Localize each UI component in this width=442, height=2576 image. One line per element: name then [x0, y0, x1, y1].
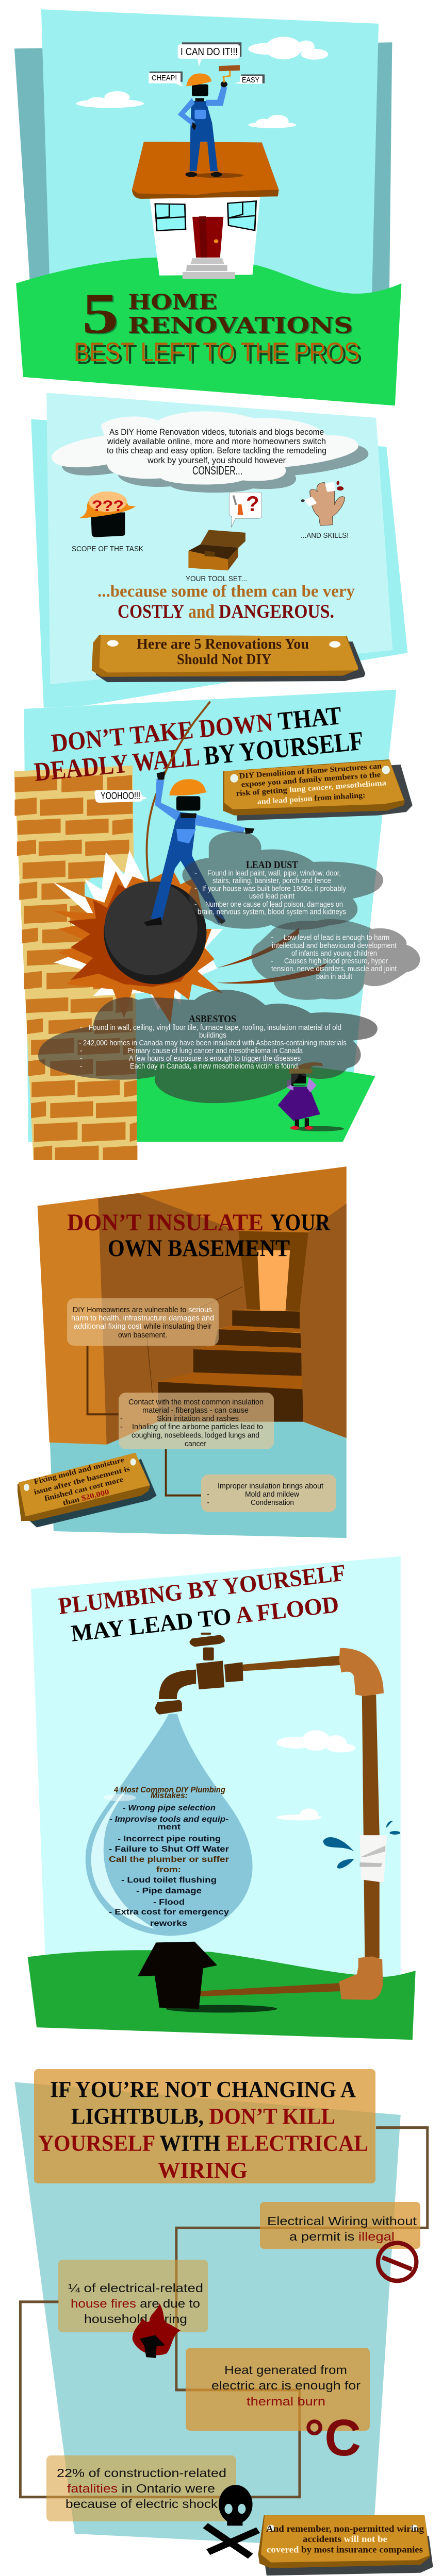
- text box: construction fatalities: because of electric shock: [66, 2497, 218, 2511]
- text box: vulnerable homeowners: harm to health, infrastructure damages and: [71, 1314, 214, 1323]
- text box: thermal burn: [186, 2348, 370, 2431]
- title: 5 home renovations: [82, 282, 353, 346]
- hero background panels: [14, 9, 401, 405]
- icon: house: [132, 142, 279, 279]
- smoke cloud: lead effects: Causes high blood pressure, hyper: [284, 957, 388, 965]
- heading: plumbing by yourself may lead to a flood: MAY LEAD TO A FLOOD: [70, 1591, 340, 1647]
- title: 5 home renovations: 5: [82, 282, 119, 346]
- text box: fiberglass: coughing, nosebleeds, lodged lungs and: [132, 1431, 259, 1439]
- text box: construction fatalities: 22% of construction-related: [57, 2466, 226, 2480]
- smoke cloud: asbestos: A few hours of exposure is enough to trigger the diseases: [129, 1055, 301, 1063]
- smoke cloud: asbestos: Each day in Canada, a new mesothelioma victim is found.: [130, 1062, 300, 1071]
- intro cloud: [52, 412, 368, 493]
- heading: don't insulate your own basement: OWN BASEMENT: [108, 1235, 290, 1262]
- text box: fiberglass: cancer: [185, 1440, 206, 1448]
- heading: changing a lightbulb: [34, 2069, 375, 2183]
- label: your tool set: YOUR TOOL SET...: [186, 574, 247, 583]
- smoke cloud: lead dust: -: [194, 869, 197, 877]
- text: plumbing mistakes: - Extra cost for emergency: [109, 1908, 229, 1917]
- demolition background, wall and lawn: [14, 690, 397, 1160]
- text box: thermal burn: electric arc is enough for: [211, 2379, 361, 2392]
- text: plumbing mistakes: - Pipe damage: [136, 1887, 202, 1895]
- text box: improper insulation: [201, 1475, 336, 1512]
- smoke cloud: asbestos: [38, 990, 378, 1103]
- text: plumbing mistakes: - Failure to Shut Off Water: [109, 1845, 229, 1854]
- text box: permit: Electrical Wiring without: [267, 2214, 417, 2228]
- icon: bandaged hand: [301, 481, 345, 526]
- icon: skull and crossbones: [205, 2485, 258, 2556]
- smoke cloud: asbestos: -: [80, 1062, 83, 1071]
- basement room scene: [38, 1166, 347, 1538]
- text: costly and dangerous: COSTLY: [118, 601, 184, 622]
- text box: construction fatalities: [46, 2455, 236, 2521]
- wooden sign: here are 5 renovations: [92, 635, 365, 682]
- icon: burning house: [133, 2303, 181, 2358]
- wooden sign: mold cost: [18, 1453, 157, 1528]
- panel: hero: [14, 9, 401, 405]
- text: plumbing mistakes: - Incorrect pipe routing: [118, 1835, 221, 1843]
- heading: don't insulate your own basement: DON’T INSULATE: [67, 1209, 264, 1236]
- wooden sign: mold cost: Fixing mold and moisture: [33, 1456, 125, 1486]
- smoke cloud: lead effects: of infants and young children: [291, 950, 377, 958]
- title: 5 home renovations: HOME: [128, 290, 217, 314]
- text box: vulnerable homeowners: DIY Homeowners are vulnerable to serious: [73, 1306, 212, 1314]
- text box: fiberglass: Contact with the most common insulation: [128, 1398, 264, 1406]
- icon: flooded house silhouette: [138, 1942, 277, 2012]
- text: costly and dangerous: DANGEROUS.: [219, 601, 334, 622]
- smoke cloud: lead dust: If your house was built before 1960s, it probably: [202, 885, 347, 893]
- panel: plumbing: [28, 1556, 416, 2040]
- smoke cloud: lead effects: -: [271, 934, 273, 942]
- icon: worker riding ball: [144, 771, 254, 926]
- smoke cloud: asbestos: -: [80, 1055, 83, 1063]
- wooden sign: insurance warning: covered by most insurance companies: [267, 2544, 423, 2554]
- text box: fiberglass: -: [120, 1423, 123, 1431]
- wooden sign: here are 5 renovations: Here are 5 Renovations You: [137, 636, 309, 652]
- text box: fiberglass: Skin irritation and rashes: [157, 1415, 239, 1423]
- callout: cheap: CHEAP!: [152, 74, 177, 82]
- callout: I can do it: I CAN DO IT!!!: [181, 46, 238, 58]
- text: plumbing mistakes: - Improvise tools and equip-: [109, 1815, 228, 1824]
- panel: consider intro: [31, 393, 407, 708]
- heading: don't insulate your own basement: YOUR: [270, 1209, 331, 1236]
- smoke cloud: lead effects: intellectual and behavioural development: [272, 942, 397, 950]
- text: plumbing mistakes: ment: [157, 1823, 181, 1832]
- smoke cloud: lead dust: brain, nervous system, blood system and kidneys: [198, 908, 346, 916]
- smoke cloud: lead effects: tension, nerve disorders, muscle and joint: [271, 965, 397, 973]
- panel: demolition wall: [14, 690, 420, 1160]
- title: 5 home renovations: RENOVATIONS: [128, 313, 353, 338]
- panel: electrical wiring: [14, 2069, 433, 2575]
- text box: thermal burn: thermal burn: [247, 2395, 325, 2408]
- wooden sign: mold cost: than $20,000: [62, 1488, 110, 1507]
- wooden sign: demolition warning: risk of getting lung cancer, mesothelioma: [236, 779, 387, 798]
- wooden sign: demolition warning: DIY Demolition of Home Structures can: [239, 762, 382, 781]
- plumbing sky and lawn: [28, 1556, 416, 2040]
- smoke cloud: lead dust: -: [194, 885, 197, 893]
- panel: basement insulation: [18, 1166, 347, 1538]
- text box: fiberglass: -: [120, 1415, 123, 1423]
- wooden sign: insurance warning: And remember, non-permitted wiring: [266, 2523, 424, 2534]
- smoke cloud: lead dust: stairs, railing, banister, porch and fence: [212, 877, 331, 885]
- wooden sign: demolition warning: [223, 759, 413, 821]
- heading: changing a lightbulb: LIGHTBULB, DON’T KILL: [71, 2104, 335, 2129]
- text box: construction fatalities: fatalities in Ontario were: [67, 2482, 215, 2495]
- text box: house fires: [58, 2260, 208, 2332]
- icon: confused head: [80, 492, 136, 537]
- intro background panels: [31, 393, 407, 708]
- text box: vulnerable homeowners: [67, 1298, 219, 1346]
- text box: permit: [260, 2202, 420, 2249]
- heading: changing a lightbulb: WIRING: [158, 2158, 248, 2183]
- smoke cloud: asbestos: -: [80, 1024, 83, 1032]
- icon: degrees celsius: °C: [304, 2409, 361, 2467]
- callout: easy: [234, 74, 265, 84]
- label: and skills: ...AND SKILLS!: [301, 531, 349, 540]
- text: plumbing mistakes: - Wrong pipe selection: [123, 1804, 216, 1812]
- smoke cloud: asbestos: Primary cause of lung cancer and mesothelioma in Canada: [127, 1047, 303, 1055]
- smoke cloud: lead dust: LEAD DUST: [246, 859, 299, 871]
- callout: cheap: [149, 72, 184, 87]
- wooden sign: insurance warning: accidents will not be: [303, 2534, 387, 2544]
- text box: improper insulation: -: [207, 1490, 209, 1499]
- rope and wrecking ball: [104, 702, 210, 984]
- heading: don't take down that deadly wall: DEADLY WALL BY YOURSELF: [33, 726, 365, 787]
- smoke cloud: lead effects: [251, 919, 420, 1000]
- smoke cloud: lead dust: [182, 832, 383, 930]
- smoke cloud: asbestos: ASBESTOS: [189, 1013, 236, 1025]
- text: plumbing mistakes: from:: [156, 1866, 181, 1874]
- smoke cloud: lead dust: Found in lead paint, wall, pipe, window, door,: [207, 870, 341, 878]
- smoke cloud: lead dust: Number one cause of lead poison, damages on: [205, 901, 343, 909]
- text: intro paragraph: As DIY Home Renovation videos, tutorials and blogs become: [109, 427, 324, 437]
- icon: confused head: ???: [92, 498, 124, 515]
- text box: improper insulation: Condensation: [251, 1499, 294, 1507]
- smoke cloud: asbestos: -: [80, 1047, 83, 1055]
- explosion: [52, 850, 328, 1024]
- heading: don't take down that deadly wall: [33, 701, 365, 787]
- subtitle: best left to the pros: BEST LEFT TO THE PROS: [74, 337, 359, 367]
- smoke cloud: lead effects: Low level of lead is enough to harm: [284, 934, 389, 942]
- icon: toolbox: [188, 530, 245, 570]
- text box: fiberglass: Inhaling of fine airborne particles lead to: [132, 1423, 263, 1431]
- wooden sign: demolition warning: expose you and family members to the: [241, 771, 381, 789]
- callout: yoohoo: YOOHOO!!!: [101, 791, 140, 802]
- heading: plumbing by yourself may lead to a flood: PLUMBING BY YOURSELF: [57, 1559, 347, 1619]
- icon: faucet: [155, 1633, 243, 1715]
- text: plumbing mistakes: 4 Most Common DIY Plumbing: [113, 1786, 225, 1794]
- smoke cloud: asbestos: Found in wall, ceiling, vinyl floor tile, furnace tape, roofing, insulation material of old: [89, 1024, 341, 1032]
- text box: vulnerable homeowners: own basement.: [118, 1331, 167, 1340]
- icon: girl covering face: [278, 1062, 344, 1131]
- text: plumbing mistakes: Call the plumber or suffer: [109, 1855, 229, 1864]
- text: plumbing mistakes: [109, 1786, 229, 1928]
- wooden sign: here are 5 renovations: Should Not DIY: [177, 652, 271, 668]
- smoke cloud: lead dust: used lead paint: [249, 892, 294, 901]
- text box: house fires: house fires are due to: [71, 2297, 200, 2310]
- text box: permit: a permit is illegal: [289, 2230, 395, 2243]
- heading: don't insulate your own basement: [67, 1209, 331, 1262]
- icon: prohibition sign: [378, 2243, 416, 2281]
- smoke cloud: lead effects: -: [271, 957, 273, 965]
- text box: fiberglass: [119, 1393, 274, 1449]
- text box: thermal burn: Heat generated from: [224, 2363, 347, 2377]
- text box: improper insulation: Mold and mildew: [245, 1490, 299, 1499]
- icon: worker on roof: [178, 65, 243, 178]
- callout: yoohoo: [94, 790, 148, 803]
- label: scope of the task: SCOPE OF THE TASK: [72, 545, 143, 553]
- heading: changing a lightbulb: YOURSELF WITH ELECTRICAL: [38, 2131, 368, 2156]
- smoke cloud: asbestos: - 242,000 homes in Canada may have been insulated with Asbestos-containing materials: [79, 1039, 347, 1047]
- text: intro paragraph: work by yourself, you should however: [147, 455, 286, 465]
- text box: fiberglass: material - fiberglass - can cause: [142, 1406, 249, 1415]
- text: costly and dangerous: [118, 601, 334, 622]
- wooden sign: insurance warning: [258, 2515, 433, 2575]
- text: plumbing mistakes: - Loud toilet flushing: [121, 1876, 217, 1885]
- callout: I can do it: [178, 42, 241, 66]
- wooden sign: mold cost: finished can cost more: [44, 1476, 124, 1503]
- callout: easy: EASY: [242, 76, 259, 84]
- text: plumbing mistakes: Mistakes:: [151, 1791, 188, 1800]
- heading: changing a lightbulb: IF YOU’RE NOT CHANGING A: [50, 2077, 356, 2102]
- text: plumbing mistakes: - Flood: [153, 1898, 185, 1907]
- text box: improper insulation: Improper insulation brings about: [218, 1482, 323, 1490]
- wooden sign: mold cost: issue after the basement is: [33, 1465, 131, 1497]
- text box: improper insulation: -: [207, 1499, 209, 1507]
- text box: house fires: household wiring: [84, 2312, 187, 2326]
- wooden sign: demolition warning: and lead poison from inhaling:: [257, 791, 366, 806]
- text: costly and dangerous: and: [188, 601, 215, 622]
- icon: water drop: [86, 1714, 253, 1936]
- text: intro paragraph: widely available online, more and more homeowners switch: [107, 436, 326, 446]
- text box: vulnerable homeowners: additional fixing cost while insulating their: [74, 1323, 211, 1331]
- icon: leaking pipe: [200, 1648, 400, 2000]
- text box: house fires: ¼ of electrical-related: [68, 2281, 203, 2295]
- electrical background and connector: [14, 2082, 428, 2549]
- text: intro paragraph: CONSIDER...: [192, 464, 242, 477]
- smoke cloud: lead effects: pain in adult: [316, 973, 352, 981]
- text: intro paragraph: [107, 427, 326, 477]
- smoke cloud: lead dust: -: [194, 901, 197, 909]
- callout: tool question: [229, 492, 262, 528]
- text: intro paragraph: to this cheap and easy option. Before tackling the remodeling: [107, 446, 326, 455]
- smoke cloud: asbestos: buildings: [199, 1031, 226, 1040]
- text: plumbing mistakes: reworks: [150, 1919, 187, 1928]
- text: because some of them: ...because some of them can be very: [97, 582, 355, 601]
- callout: tool question: ?: [246, 492, 259, 516]
- heading: plumbing by yourself may lead to a flood: [57, 1559, 347, 1647]
- heading: don't take down that deadly wall: DON’T TAKE DOWN THAT: [50, 701, 342, 757]
